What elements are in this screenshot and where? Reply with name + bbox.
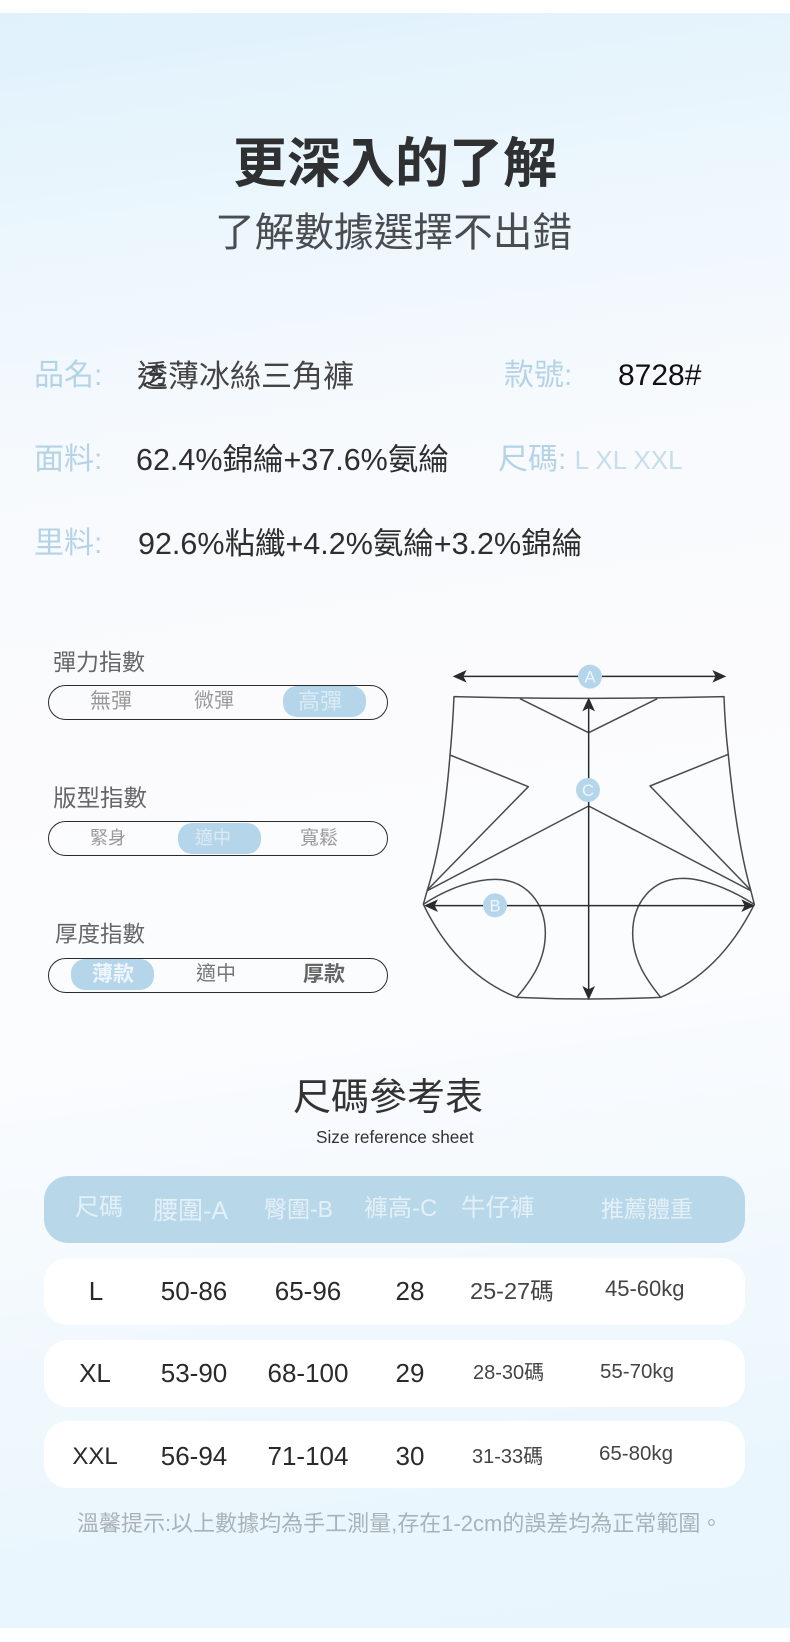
footnote: 溫馨提示:以上數據均為手工測量,存在1-2cm的誤差均為正常範圍。 xyxy=(77,1511,722,1536)
panel: elasticity index xyxy=(48,649,388,720)
highlight: thin xyxy=(71,959,154,990)
table heading: 尺碼參考表 xyxy=(293,1077,483,1119)
option: medium: 適中 xyxy=(196,963,236,985)
weight XL: 55-70kg xyxy=(600,1360,674,1383)
waist L: 50-86 xyxy=(161,1276,227,1306)
option: thick: 厚款 xyxy=(303,963,345,986)
marker C xyxy=(576,778,600,802)
hip L: 65-96 xyxy=(275,1276,341,1306)
heading: thickness: 厚度指數 xyxy=(55,922,145,947)
jeans XXL: 31-33碼 xyxy=(472,1446,543,1468)
table subheading: Size reference sheet xyxy=(316,1127,474,1147)
subtitle: 了解數據選擇不出錯 xyxy=(215,211,572,255)
label: fabric: 面料: xyxy=(34,443,102,476)
label: style number: 款號: xyxy=(504,359,572,392)
value: style number: 8728# xyxy=(618,359,701,392)
weight L: 45-60kg xyxy=(605,1276,685,1301)
marker A: A xyxy=(584,668,596,687)
value: lining: 92.6%粘纖+4.2%氨綸+3.2%錦綸 xyxy=(138,527,582,561)
column: hip: 臀圍-B xyxy=(264,1196,333,1222)
title: 更深入的了解 xyxy=(233,134,557,194)
hip XXL: 71-104 xyxy=(268,1441,348,1471)
weight XXL: 65-80kg xyxy=(599,1442,673,1465)
arrows xyxy=(424,670,755,1000)
diagram: underwear measurements xyxy=(422,664,756,1000)
option: tight: 緊身 xyxy=(90,828,126,848)
jeans XL: 28-30碼 xyxy=(473,1362,544,1384)
option: loose: 寬鬆 xyxy=(300,828,338,849)
heading: elasticity: 彈力指數 xyxy=(53,649,145,675)
option: none: 無彈 xyxy=(90,690,132,713)
height XXL: 30 xyxy=(396,1441,424,1471)
column: height: 褲高-C xyxy=(364,1195,437,1222)
label: product name: 品名: xyxy=(34,359,102,392)
hip XL: 68-100 xyxy=(268,1358,348,1388)
option: high: 高彈 xyxy=(298,689,342,714)
highlight: medium fit xyxy=(178,823,261,854)
height XL: 29 xyxy=(396,1358,424,1388)
option: medium: 適中 xyxy=(195,828,231,848)
marker B: B xyxy=(489,896,501,915)
overlapping glyph on first character: 乏 xyxy=(142,363,167,391)
column: size: 尺碼 xyxy=(75,1194,123,1221)
waist XL: 53-90 xyxy=(161,1358,227,1388)
waist XXL: 56-94 xyxy=(161,1441,227,1471)
height L: 28 xyxy=(396,1276,424,1306)
label: lining: 里料: xyxy=(34,527,102,560)
highlight: high elasticity xyxy=(283,686,366,717)
garment outline xyxy=(423,697,754,999)
column: waist: 腰圍-A xyxy=(153,1197,228,1225)
panel: thickness index xyxy=(48,922,388,993)
panel: fit index xyxy=(48,785,388,856)
scale pill: elasticity xyxy=(48,685,388,720)
scale pill: thickness xyxy=(48,958,388,993)
marker A xyxy=(578,665,602,689)
table row XXL xyxy=(44,1421,745,1488)
heading: fit: 版型指數 xyxy=(53,785,147,811)
option: thin: 薄款 xyxy=(92,963,134,986)
column: weight: 推薦體重 xyxy=(601,1196,693,1222)
scale pill: fit xyxy=(48,821,388,856)
marker B xyxy=(483,893,507,917)
option: slight: 微彈 xyxy=(194,690,234,712)
table row XL xyxy=(44,1340,745,1407)
size XXL: XXL xyxy=(72,1443,118,1470)
column: jeans: 牛仔褲 xyxy=(461,1195,534,1222)
value: product name: 透薄冰絲三角褲 xyxy=(137,359,354,394)
label and value: sizes: 尺碼: L XL XXL xyxy=(498,443,683,476)
size XL: XL xyxy=(79,1358,111,1388)
jeans L: 25-27碼 xyxy=(470,1278,554,1304)
value: fabric: 62.4%錦綸+37.6%氨綸 xyxy=(136,443,449,477)
table row L xyxy=(44,1258,745,1325)
table header row xyxy=(44,1176,745,1243)
size L: L xyxy=(89,1276,103,1306)
marker C: C xyxy=(582,781,594,800)
panel: product info xyxy=(34,359,702,561)
